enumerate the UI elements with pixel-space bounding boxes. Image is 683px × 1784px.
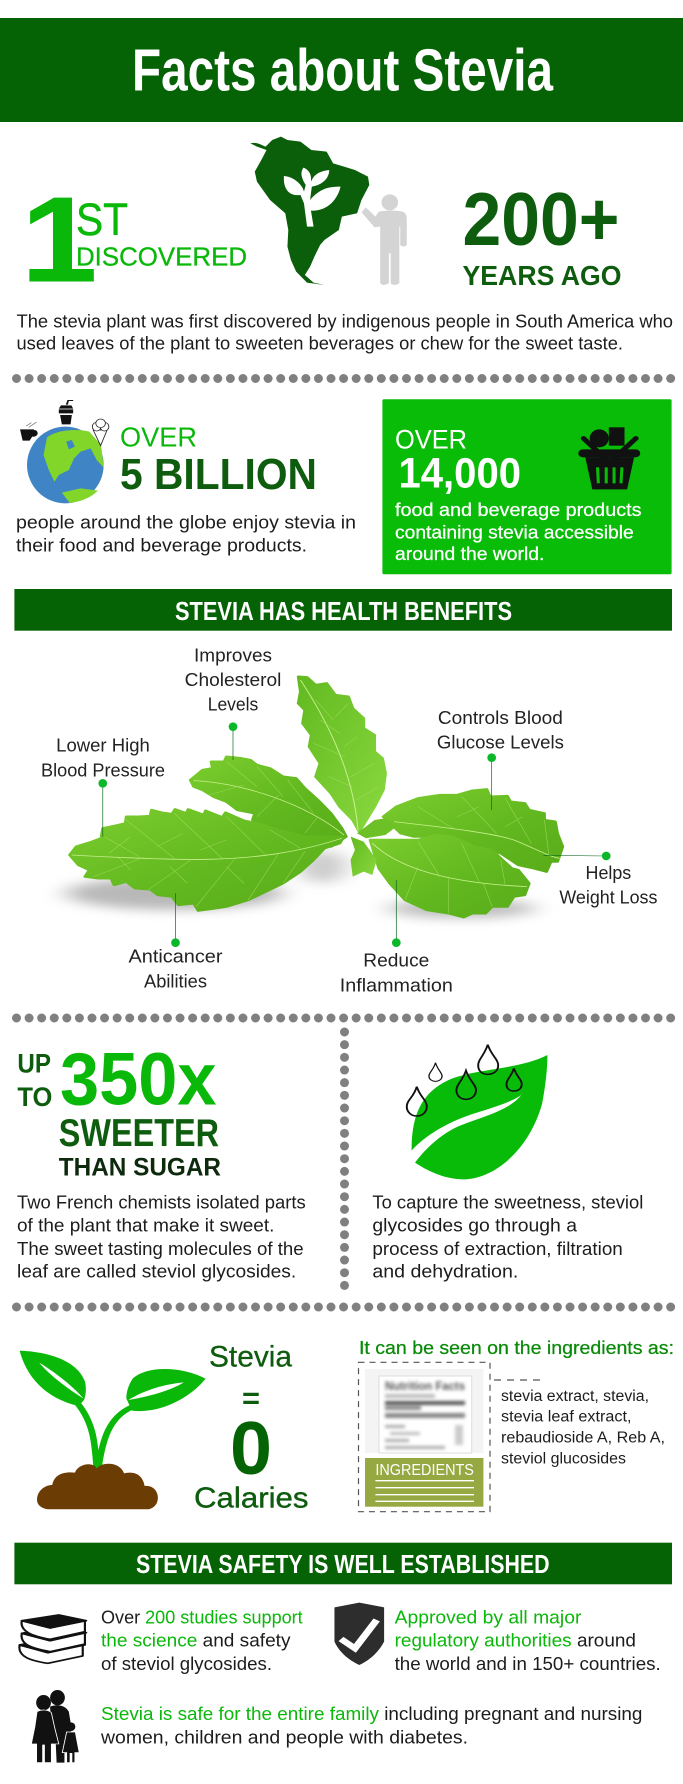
stat: up to 350x sweeter than sugar: THAN SUGAR — [59, 1154, 221, 1182]
text: ingredient names: stevia leaf extract, — [501, 1409, 632, 1426]
label: improves cholesterol levels: Improves — [194, 646, 272, 666]
icon: globe with food and drink — [20, 400, 109, 503]
icon: South America map with plant — [250, 137, 369, 285]
stat: 1st discovered — [21, 172, 247, 308]
stat: stevia = 0 calories — [194, 1341, 308, 1514]
label: improves cholesterol levels: Cholesterol — [185, 670, 281, 690]
stat: 200+ years ago: YEARS AGO — [462, 260, 622, 291]
text: French chemists: leaf are called steviol glycosides. — [17, 1262, 296, 1282]
panel: 14,000 products: 14,000 — [398, 449, 521, 497]
stat: stevia = 0 calories: = — [242, 1382, 260, 1415]
text: discovery description: The stevia plant was first discovered by indigenous people in South America who — [16, 311, 673, 331]
connector: blood pressure — [98, 779, 107, 837]
stat: 1st discovered: DISCOVERED — [76, 242, 247, 272]
leaf: top — [298, 677, 385, 832]
label: controls blood glucose levels — [437, 708, 564, 752]
stat: up to 350x sweeter than sugar — [17, 1037, 221, 1182]
label: helps weight loss: Helps — [586, 863, 631, 883]
icon: books — [19, 1615, 86, 1663]
panel: 14,000 products: OVER — [395, 424, 467, 454]
label: lower high blood pressure: Lower High — [56, 736, 150, 756]
label: helps weight loss: Weight Loss — [559, 887, 657, 907]
text: discovery description — [16, 311, 673, 353]
text: the science: the science and safety — [101, 1631, 290, 1651]
stat: 200+ years ago: 200+ — [462, 177, 620, 261]
icon: leaf with water drops — [407, 1045, 547, 1179]
label: lower high blood pressure: Blood Pressure — [41, 761, 165, 781]
text: capture the sweetness — [372, 1192, 643, 1282]
heading: ingredients: It can be seen on the ingredients as: — [359, 1338, 674, 1358]
heading: safety — [14, 1543, 672, 1584]
stat: up to 350x sweeter than sugar: TO — [17, 1082, 52, 1112]
text: discovery description: used leaves of the plant to sweeten beverages or chew for the sweet taste. — [16, 333, 623, 353]
panel: 14,000 products — [382, 399, 672, 574]
label: lower high blood pressure — [41, 736, 165, 781]
stat: over 5 billion: 5 BILLION — [120, 450, 317, 499]
stat: stevia = 0 calories: Stevia — [209, 1341, 292, 1374]
panel: 14,000 products: around the world. — [395, 544, 544, 564]
text: steviol glycosides: of steviol glycosides. — [101, 1654, 272, 1674]
icon: ice cream cone — [92, 419, 109, 446]
stat: stevia = 0 calories: Calaries — [194, 1482, 308, 1514]
label: controls blood glucose levels: Glucose Levels — [437, 732, 564, 752]
connector: cholesterol — [229, 722, 237, 760]
label: reduce inflammation: Reduce — [363, 951, 429, 971]
text: regulatory authorities: regulatory authorities around — [395, 1631, 636, 1651]
text: ingredient names: rebaudioside A, Reb A, — [501, 1429, 665, 1446]
stat: up to 350x sweeter than sugar: SWEETER — [59, 1112, 219, 1155]
text: approved: Approved by all major — [395, 1607, 581, 1627]
text: safe for family: women, children and people with diabetes. — [100, 1727, 468, 1747]
label: anticancer abilities: Anticancer — [128, 947, 223, 967]
text: French chemists: The sweet tasting molecules of the — [17, 1239, 304, 1259]
connector: inflammation — [392, 880, 401, 947]
connector: anticancer — [171, 893, 180, 947]
text: French chemists: of the plant that make it sweet. — [17, 1216, 274, 1236]
panel: 14,000 products: food and beverage products — [395, 500, 642, 520]
stat: over 5 billion — [120, 422, 317, 499]
label: improves cholesterol levels — [185, 646, 281, 715]
label: reduce inflammation — [340, 951, 453, 996]
label: anticancer abilities: Abilities — [144, 971, 207, 991]
heading: safety: STEVIA SAFETY IS WELL ESTABLISHED — [136, 1549, 550, 1579]
title: Facts about Stevia — [132, 38, 554, 104]
leaf: lower right — [370, 835, 529, 917]
stat: over 5 billion: OVER — [120, 422, 197, 453]
text: people around the globe: their food and beverage products. — [16, 536, 307, 556]
blurred nutrition label: Nutrition Facts — [385, 1379, 465, 1393]
icon: coffee cup — [20, 422, 38, 441]
text: capture the sweetness: process of extraction, filtration — [372, 1239, 623, 1259]
leaf: small centre — [351, 818, 396, 877]
stat: up to 350x sweeter than sugar: 350x — [60, 1037, 216, 1120]
text: safe for family: Stevia is safe for the entire family including pregnant and nursing — [101, 1704, 642, 1724]
label: improves cholesterol levels: Levels — [208, 695, 258, 715]
text: people around the globe: people around the globe enjoy stevia in — [16, 512, 356, 532]
label: reduce inflammation: Inflammation — [340, 976, 453, 996]
icon: shield with check — [334, 1603, 384, 1665]
text: ingredient names: steviol glucosides — [501, 1450, 626, 1467]
leaf: upper left — [190, 757, 346, 847]
icon: family — [31, 1690, 79, 1763]
text: French chemists — [17, 1192, 306, 1282]
icon: soda cup — [59, 400, 73, 424]
panel: 14,000 products: containing stevia accessible — [395, 522, 634, 542]
stat: 1st discovered: 1 — [21, 172, 98, 308]
figure: nutrition label and ingredients card — [358, 1362, 490, 1512]
stat: up to 350x sweeter than sugar: UP — [17, 1049, 51, 1079]
icon: sprout in soil — [20, 1351, 206, 1509]
text: capture the sweetness: glycosides go through a — [372, 1216, 578, 1236]
text: ingredient names: stevia extract, stevia, — [501, 1388, 649, 1405]
title banner — [0, 18, 683, 122]
icon: person — [361, 194, 407, 285]
connector: glucose — [487, 753, 496, 810]
blurred nutrition label — [385, 1379, 465, 1449]
text: safe for family — [100, 1704, 642, 1747]
text: capture the sweetness: To capture the sweetness, steviol — [372, 1192, 643, 1212]
illustration: stevia leaves — [65, 677, 611, 947]
text: French chemists: Two French chemists isolated parts — [17, 1192, 306, 1212]
icon: shopping basket — [578, 427, 640, 489]
text: capture the sweetness: and dehydration. — [372, 1262, 518, 1282]
figure: nutrition label and ingredients card: INGREDIENTS — [375, 1462, 474, 1479]
text: world and countries: the world and in 150+ countries. — [395, 1654, 661, 1674]
connector: weight loss — [544, 852, 611, 860]
label: helps weight loss — [559, 863, 657, 907]
leaf: large left — [70, 809, 344, 911]
stat: 1st discovered: ST — [76, 194, 128, 245]
heading: health benefits: STEVIA HAS HEALTH BENEFITS — [175, 596, 512, 626]
heading: health benefits — [14, 589, 672, 631]
label: anticancer abilities — [128, 947, 223, 991]
stat: stevia = 0 calories: 0 — [230, 1406, 272, 1490]
text: 200 studies: Over 200 studies support — [101, 1607, 303, 1627]
leaf: right upper — [383, 789, 563, 872]
label: controls blood glucose levels: Controls Blood — [438, 708, 563, 728]
text: people around the globe — [16, 512, 356, 556]
text: ingredient names — [501, 1388, 665, 1467]
